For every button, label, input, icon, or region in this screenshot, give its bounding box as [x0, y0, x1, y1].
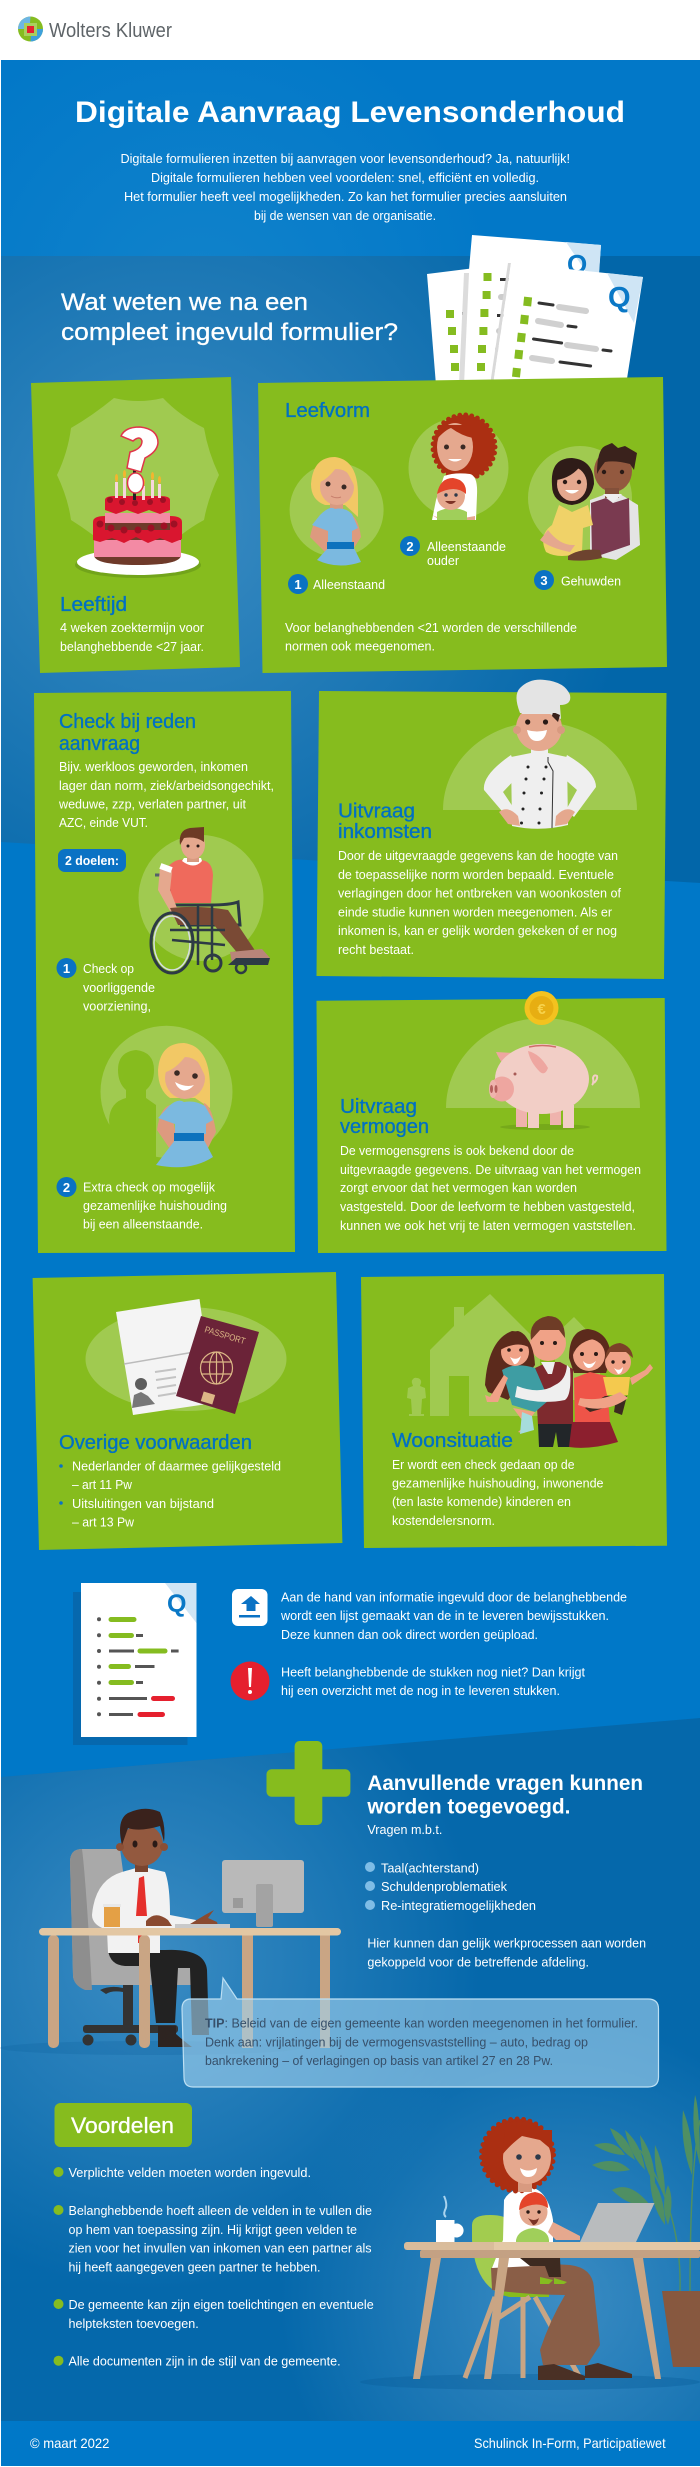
section heading: compleet ingevuld formulier? — [61, 319, 398, 346]
left form — [427, 268, 490, 385]
icon: coin — [524, 991, 558, 1025]
figure: alleenstaande ouder — [408, 415, 508, 520]
body text — [392, 1457, 604, 1528]
body text: recht bestaat. — [338, 942, 414, 957]
body text: belanghebbende <27 jaar. — [60, 639, 204, 654]
panel: Uitvraag inkomsten — [316, 680, 666, 979]
list: voordelen: Belanghebbende hoeft alleen de velden in te vullen die — [68, 2203, 372, 2218]
background: dark section behind first panels — [1, 256, 700, 883]
figure: chef — [484, 680, 596, 829]
list: voordelen: helpteksten toevoegen. — [68, 2316, 199, 2331]
intro text: Digitale formulieren hebben veel voordelen: snel, efficiënt en volledig. — [151, 170, 539, 185]
heading: vermogen — [340, 1116, 429, 1138]
heading: Leeftijd — [60, 594, 127, 616]
heading: Uitvraag — [340, 1096, 417, 1118]
figure: gehuwden — [528, 443, 640, 561]
background: top blue band — [1, 60, 700, 260]
body text — [340, 1143, 641, 1233]
icon: stack of forms — [427, 235, 643, 385]
middle form: Q — [567, 249, 587, 279]
icon: green plus — [266, 1741, 350, 1825]
section heading — [61, 289, 398, 346]
figure: alleenstaand — [290, 457, 384, 566]
number badge 2 with text: gezamenlijke huishouding — [83, 1198, 227, 1213]
child — [516, 2228, 549, 2244]
text: werkprocessen — [367, 1936, 646, 1970]
hair and face — [482, 2119, 554, 2191]
icon: document checklist — [73, 1583, 196, 1745]
list: voordelen: Alle documenten zijn in de stijl van de gemeente. — [68, 2354, 341, 2369]
list: voordelen — [54, 2165, 374, 2369]
body text: zorgt ervoor dat het vermogen kan worden — [340, 1180, 577, 1195]
desk — [404, 2242, 700, 2250]
list: voordelen: op hem van toepassing zijn. Hij krijgt geen velden te — [68, 2222, 357, 2237]
chair — [472, 2215, 549, 2297]
number badge 1 with label: Alleenstaand — [313, 577, 385, 592]
number badge 2 with text: Extra check op mogelijk — [83, 1180, 215, 1195]
body text: Door de uitgevraagde gegevens kan de hoogte van — [338, 848, 618, 863]
intro text: Het formulier heeft veel mogelijkheden. Zo kan het formulier precies aansluiten — [124, 189, 567, 204]
body text: Er wordt een check gedaan op de — [392, 1457, 574, 1472]
panel: Leefvorm — [258, 377, 667, 673]
icon: piggy bank — [489, 1044, 597, 1130]
number badge 2 with text: bij een alleenstaande. — [83, 1217, 203, 1232]
number badge 3 with label: 3 — [540, 573, 548, 588]
intro text: Digitale formulieren inzetten bij aanvragen voor levensonderhoud? Ja, natuurlijk! — [120, 151, 570, 166]
bullet list: – art 13 Pw — [72, 1515, 135, 1530]
number badge 1 with text — [56, 958, 155, 1014]
number badge 1 with text: voorliggende — [83, 980, 155, 995]
body text: verlagingen door het ontbreken van woonkosten of — [338, 886, 621, 901]
icon: passport — [116, 1299, 259, 1415]
text: upload explanation: wordt een lijst gemaakt van de in te leveren bewijsstukken. — [280, 1608, 609, 1623]
body text: vastgesteld. Door de leefvorm te hebben vastgesteld, — [340, 1199, 635, 1214]
heading: Check bij reden — [59, 711, 196, 733]
body text — [338, 848, 621, 957]
heading — [59, 711, 196, 755]
heading: Leefvorm — [285, 400, 370, 422]
icon: logo globe — [18, 16, 43, 42]
number badge 1 with text: voorziening, — [83, 999, 151, 1014]
laptop — [580, 2203, 654, 2242]
section heading: Wat weten we na een — [61, 289, 308, 316]
number badge 1 with text: Check op — [83, 961, 134, 976]
heading — [338, 801, 432, 843]
body text: 4 weken zoektermijn voor — [60, 620, 205, 635]
number badge 2 with label — [400, 536, 506, 568]
footer text: Schulinck In-Form, Participatiewet — [474, 2435, 666, 2451]
bullet list: vragen — [365, 1861, 536, 1913]
number badge 2 with label: Alleenstaande — [427, 539, 506, 554]
ellipse backdrop — [86, 1307, 286, 1411]
icon: house backdrop — [407, 1294, 600, 1416]
body text: inkomen is, kan er gelijk worden gekeken of er nog — [338, 923, 617, 938]
pill: 2 doelen — [58, 849, 126, 872]
heading: inkomsten — [338, 821, 432, 843]
text: werkprocessen: Hier kunnen dan gelijk werkprocessen aan worden — [367, 1936, 646, 1951]
list: voordelen: zien voor het invullen van inkomen van een partner als — [68, 2241, 372, 2256]
body text — [285, 620, 577, 654]
button: Voordelen — [54, 2103, 192, 2147]
torso — [492, 2187, 553, 2268]
plant — [592, 2095, 700, 2291]
panel: Uitvraag vermogen — [316, 991, 666, 1253]
footer bar background — [1, 2421, 700, 2466]
body text: kunnen we ook het vrij te laten vermogen vaststellen. — [340, 1218, 636, 1233]
icon: passport: PASSPORT — [203, 1324, 247, 1346]
heading: Overige voorwaarden — [59, 1432, 252, 1454]
list: voordelen: De gemeente kan zijn eigen toelichtingen en eventuele — [68, 2297, 374, 2312]
semicircle backdrop — [446, 1018, 640, 1108]
figure: family — [485, 1316, 653, 1448]
front form: Q — [608, 282, 631, 314]
body text: Voor belanghebbenden <21 worden de verschillende — [285, 620, 577, 635]
intro text: bij de wensen van de organisatie. — [254, 208, 436, 223]
number badge 2 with text: 2 — [63, 1180, 70, 1195]
intro text — [120, 151, 570, 223]
figure: man in wheelchair — [138, 827, 270, 973]
logo: Wolters Kluwer — [18, 16, 172, 42]
number badge 1 with text: 1 — [63, 961, 70, 976]
background: lower section — [1, 1718, 700, 2421]
bullet list: – art 11 Pw — [72, 1477, 133, 1492]
title: Digitale Aanvraag Levensonderhoud — [75, 96, 625, 129]
text: warning explanation: Heeft belanghebbende de stukken nog niet? Dan krijgt — [281, 1665, 585, 1680]
number badge 3 with label — [534, 570, 621, 590]
heading: Woonsituatie — [392, 1430, 513, 1452]
heading: aanvraag — [59, 733, 140, 755]
figure: woman with partner silhouette — [100, 1026, 232, 1167]
body text: De vermogensgrens is ook bekend door de — [340, 1143, 574, 1158]
bullet list: Uitsluitingen van bijstand — [72, 1496, 214, 1511]
text: warning explanation — [281, 1665, 585, 1698]
starburst behind cake — [57, 398, 219, 552]
body text: weduwe, zzp, verlaten partner, uit — [58, 797, 246, 812]
footer text — [30, 2435, 666, 2451]
callout: TIP — [182, 1978, 658, 2087]
bullet list: vragen: Re-integratiemogelijkheden — [381, 1898, 536, 1913]
body text: einde studie kunnen worden meegenomen. Als er — [338, 905, 613, 920]
panel: Overige voorwaarden — [33, 1272, 342, 1550]
plant pot — [662, 2291, 700, 2367]
front form — [490, 263, 643, 385]
icon: birthday cake — [75, 427, 201, 578]
number badge 2 with label: 2 — [406, 539, 414, 554]
heading: Aanvullende vragen: worden toegevoegd. — [366, 1795, 570, 1818]
pill: 2 doelen: 2 doelen: — [65, 853, 119, 868]
body text: (ten laste komende) kinderen en — [392, 1494, 571, 1509]
bullet list — [59, 1459, 281, 1530]
icon: upload — [232, 1589, 268, 1626]
body text: AZC, einde VUT. — [59, 815, 148, 830]
body text — [60, 620, 205, 654]
number badge 1 with label — [288, 574, 385, 594]
callout: TIP: Denk aan: vrijlatingen bij de vermogensvaststelling – auto, bedrag op — [205, 2035, 588, 2050]
body text: normen ook meegenomen. — [285, 638, 435, 654]
coffee cup — [436, 2220, 464, 2242]
body text: lager dan norm, ziek/arbeidsongechikt, — [59, 778, 274, 793]
list: voordelen: Verplichte velden moeten worden ingevuld. — [68, 2165, 311, 2180]
background: mid blue section — [1, 840, 700, 1800]
body text: uitgevraagde gegevens. De uitvraag van het vermogen — [340, 1162, 641, 1177]
body text: de toepasselijke norm worden bepaald. Eventuele — [338, 867, 614, 882]
number badge 2 with text — [56, 1177, 227, 1232]
footer text: © maart 2022 — [30, 2435, 110, 2451]
number badge 1 with label: 1 — [294, 577, 302, 592]
trousers and shoes — [491, 2264, 600, 2365]
icon: coin: € — [537, 1001, 546, 1018]
callout: TIP: TIP: Beleid van de eigen gemeente kan worden meegenomen in het formulier. — [205, 2016, 638, 2031]
body text: kostendelersnorm. — [392, 1513, 495, 1528]
text: vragen: Vragen m.b.t. — [367, 1822, 442, 1837]
bullet list: vragen: Schuldenproblematiek — [381, 1879, 507, 1894]
logo wordmark: Wolters Kluwer — [49, 20, 172, 42]
body text: gezamenlijke huishouding, inwonende — [392, 1476, 604, 1491]
heading — [340, 1096, 429, 1138]
icon: document checklist: Q — [167, 1590, 186, 1618]
bullet list: Nederlander of daarmee gelijkgesteld — [72, 1459, 281, 1474]
panel: Woonsituatie — [361, 1274, 667, 1548]
panel: Check bij reden aanvraag — [34, 691, 295, 1253]
heading: Aanvullende vragen: Aanvullende vragen kunnen — [367, 1772, 643, 1795]
middle form — [459, 235, 601, 385]
text: upload explanation: Aan de hand van informatie ingevuld door de belanghebbende — [281, 1590, 627, 1605]
figure: woman with child at desk — [360, 2095, 700, 2390]
text: upload explanation: Deze kunnen dan ook direct worden geüpload. — [281, 1627, 538, 1642]
text: warning explanation: hij een overzicht met de nog in te leveren stukken. — [281, 1683, 560, 1698]
number badge 2 with label: ouder — [427, 553, 460, 568]
number badge 3 with label: Gehuwden — [561, 574, 621, 588]
figure: man at desk — [0, 1809, 341, 2055]
heading: Uitvraag — [338, 801, 415, 823]
body text — [58, 759, 274, 830]
panel: Leeftijd — [31, 377, 240, 673]
icon: warning — [230, 1662, 270, 1700]
list: voordelen: hij heeft aangegeven geen partner te hebben. — [68, 2260, 320, 2275]
text: upload explanation — [280, 1590, 627, 1642]
text: werkprocessen: gekoppeld voor de betreffende afdeling. — [367, 1955, 589, 1970]
heading: Aanvullende vragen — [366, 1772, 643, 1818]
semicircle backdrop — [443, 722, 637, 810]
bullet list: vragen: Taal(achterstand) — [381, 1861, 479, 1876]
button: Voordelen: Voordelen — [71, 2113, 174, 2138]
callout: TIP: bankrekening – of verlagingen op basis van artikel 27 en 28 Pw. — [205, 2053, 553, 2068]
body text: Bijv. werkloos geworden, inkomen — [59, 759, 248, 774]
